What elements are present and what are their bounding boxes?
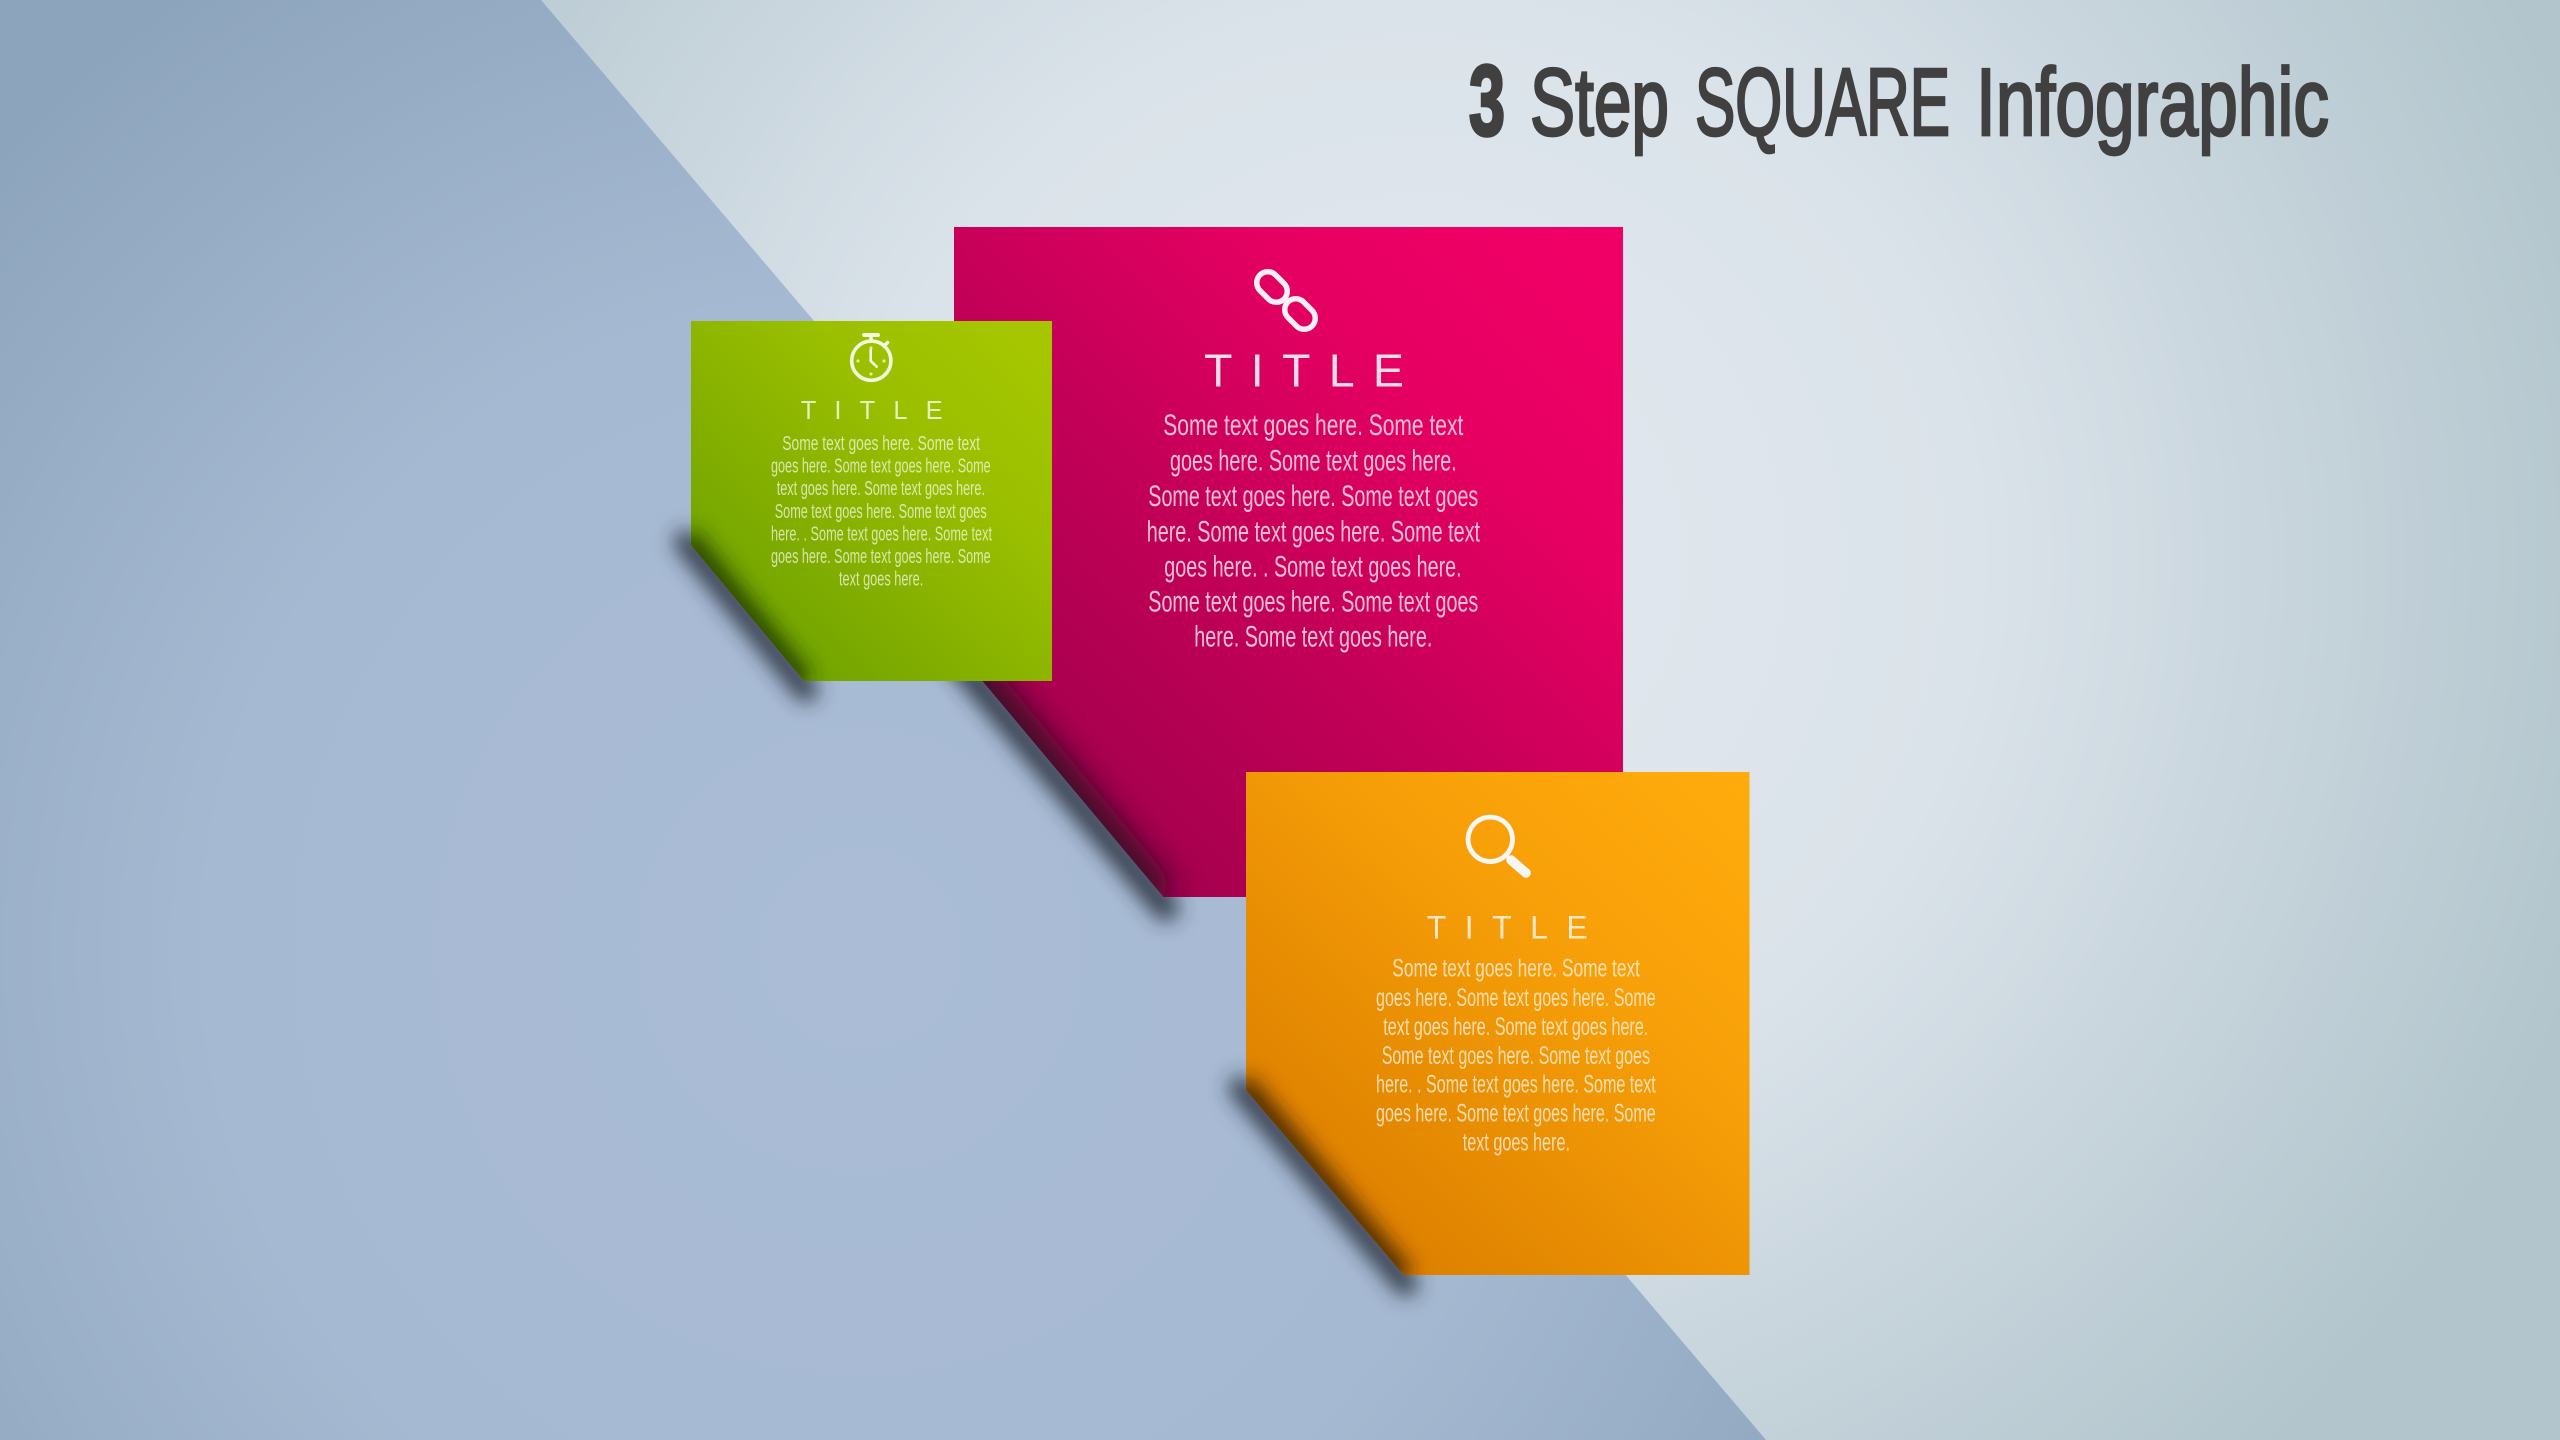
panel: green square bbox=[682, 321, 1052, 690]
text block: green body: text goes here. bbox=[839, 568, 923, 591]
text block: pink body: Some text goes here. Some text goes bbox=[1148, 586, 1478, 619]
text block: green body: Some text goes here. Some text bbox=[782, 432, 980, 455]
panel: orange square bbox=[1238, 772, 1750, 1284]
text block: green body: goes here. Some text goes here. Some bbox=[771, 455, 991, 478]
text block: orange body: goes here. Some text goes here. Some bbox=[1376, 984, 1656, 1012]
text block: orange body: here. . Some text goes here. Some text bbox=[1376, 1071, 1656, 1099]
title: SQUARE bbox=[1695, 49, 1950, 156]
icon: stopwatch bbox=[852, 335, 891, 380]
text block: pink body: goes here. . Some text goes here. bbox=[1164, 551, 1462, 584]
heading: green title: TITLE bbox=[801, 397, 943, 425]
text block: green body: text goes here. Some text goes here. bbox=[777, 477, 985, 500]
text block: orange body: goes here. Some text goes here. Some bbox=[1376, 1100, 1656, 1128]
text block: pink body bbox=[1147, 409, 1480, 654]
text block: pink body: here. Some text goes here. bbox=[1194, 621, 1432, 654]
text block: orange body: Some text goes here. Some text bbox=[1392, 955, 1640, 983]
icon: magnifier bbox=[1468, 817, 1526, 873]
title: Infographic bbox=[1976, 49, 2329, 156]
text block: orange body bbox=[1376, 955, 1656, 1157]
icon: chain link bbox=[1252, 267, 1320, 334]
text block: green body: here. . Some text goes here. Some text bbox=[771, 522, 992, 545]
title: 3 bbox=[1469, 45, 1505, 157]
title: Step bbox=[1530, 49, 1669, 156]
title bbox=[1469, 45, 2329, 157]
text block: green body: goes here. Some text goes here. Some bbox=[771, 545, 991, 568]
text block: green body: Some text goes here. Some text goes bbox=[775, 500, 987, 523]
heading: orange title: TITLE bbox=[1427, 909, 1588, 945]
text block: orange body: text goes here. Some text goes here. bbox=[1383, 1013, 1648, 1041]
text block: orange body: text goes here. bbox=[1463, 1129, 1570, 1157]
text block: pink body: goes here. Some text goes here. bbox=[1170, 445, 1457, 478]
text block: pink body: Some text goes here. Some text bbox=[1163, 409, 1464, 442]
text block: green body bbox=[771, 432, 992, 591]
text block: pink body: Some text goes here. Some text goes bbox=[1148, 480, 1478, 513]
panel: pink square bbox=[945, 227, 1623, 908]
heading: pink title: TITLE bbox=[1204, 345, 1404, 397]
text block: pink body: here. Some text goes here. Some text bbox=[1147, 516, 1480, 549]
text block: orange body: Some text goes here. Some text goes bbox=[1382, 1042, 1650, 1070]
